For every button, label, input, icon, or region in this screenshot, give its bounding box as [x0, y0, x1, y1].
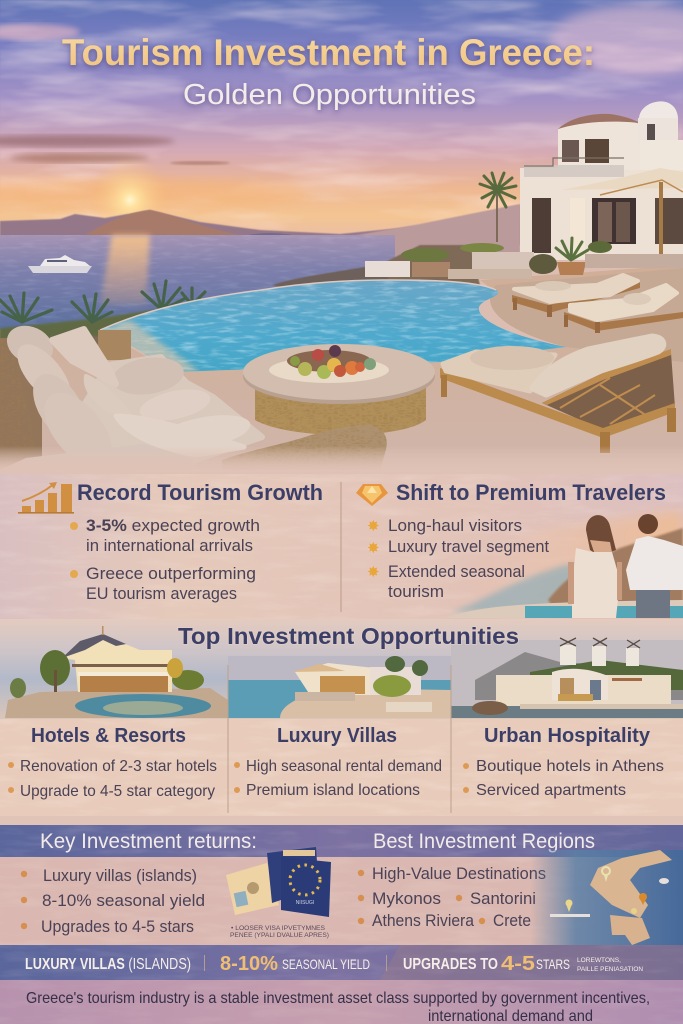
regions bullet list: Mykonos: [372, 889, 441, 908]
heading: top investment opportunities: Top Investment Opportunities: [178, 623, 519, 649]
column: hotels and resorts: Renovation of 2-3 star hotels: [20, 758, 217, 775]
scene: luxury villa: [228, 656, 451, 718]
panel: market trends: [0, 446, 683, 619]
scene: hotel and resort: [5, 626, 228, 718]
premium bullet list: ✸: [367, 540, 380, 557]
hero illustration: sunset terrace: [0, 0, 683, 479]
sea: [0, 235, 395, 331]
seat cushions: [75, 353, 262, 462]
icon: growth bar chart: [18, 482, 74, 514]
map pins: [566, 867, 647, 914]
returns bullet list: Luxury villas (islands): [43, 866, 197, 885]
growth bullet list: Greece outperforming: [86, 564, 256, 583]
stat band: [0, 945, 683, 980]
fine print: LOREWTONS,: [577, 957, 621, 964]
stat: seasonal yield: 8-10%: [220, 953, 278, 975]
column: urban hospitality: Boutique hotels in Athens: [476, 758, 664, 775]
column: urban hospitality: Urban Hospitality: [484, 725, 651, 747]
returns bullet list: [21, 866, 205, 936]
column: urban hospitality: Serviced apartments: [476, 782, 626, 799]
growth bullet list: EU tourism averages: [86, 584, 237, 603]
premium bullet list: tourism: [388, 582, 444, 601]
heading: key investment returns: Key Investment returns:: [40, 830, 257, 853]
fine print: PAILLE PENIASATION: [577, 966, 643, 973]
premium bullet list: Luxury travel segment: [388, 537, 549, 556]
returns bullet list: 8-10% seasonal yield: [42, 891, 205, 910]
stat: upgrades to 4-5 stars: 4-5: [501, 953, 535, 975]
title: main line: Tourism Investment in Greece:: [62, 32, 595, 73]
column: luxury villas: Premium island locations: [246, 782, 420, 799]
column: luxury villas: Luxury Villas: [277, 725, 397, 747]
palm tree: [480, 173, 516, 242]
throw pillows: [52, 329, 244, 455]
heading: shift to premium travelers: Shift to Premium Travelers: [396, 480, 666, 505]
couple: [568, 514, 683, 618]
icon: EU passports and visa card: NIISUGI: [296, 900, 314, 906]
infinity pool: [100, 280, 570, 375]
panel: returns and regions: [0, 816, 683, 945]
shore and palms: [0, 243, 504, 345]
returns bullet list: Upgrades to 4-5 stars: [41, 917, 194, 936]
premium bullet list: ✸: [367, 564, 380, 581]
column: hotels and resorts: Upgrade to 4-5 star category: [20, 783, 215, 800]
yacht: [28, 255, 92, 273]
hills: [0, 204, 520, 262]
scene: urban hospitality: [451, 638, 683, 718]
column: luxury villas: High seasonal rental demand: [246, 758, 442, 775]
heading: record tourism growth: [18, 480, 323, 514]
umbrella: [562, 168, 683, 264]
round stone table with fruit: [243, 344, 435, 440]
stat: upgrades to 4-5 stars: UPGRADES TO: [403, 956, 498, 973]
hero lower fade: [0, 446, 683, 474]
outdoor lounge behind pool: [412, 238, 683, 279]
regions bullet list: [358, 864, 546, 930]
premium bullet list: ✸: [367, 518, 380, 535]
deck: [0, 265, 683, 470]
rear sun loungers: [512, 275, 683, 333]
title block: [62, 32, 595, 111]
column: luxury villas: [234, 725, 442, 799]
regions bullet list: High-Value Destinations: [372, 864, 546, 883]
growth bullet list: in international arrivals: [86, 536, 253, 555]
front sun lounger: [440, 337, 676, 453]
sun: [88, 158, 172, 242]
heading: record tourism growth: Record Tourism Growth: [77, 480, 323, 505]
fruit plate: [269, 345, 389, 383]
fine print: [577, 957, 643, 973]
map of Greece: [530, 850, 683, 945]
premium bullet list: Long-haul visitors: [388, 516, 522, 535]
villa: [520, 101, 683, 260]
regions bullet list: Santorini: [470, 889, 536, 908]
stone terrace behind loungers: [490, 268, 683, 362]
footer statement: [0, 980, 683, 1024]
growth bullet list: 3-5% expected growth: [86, 516, 260, 535]
panel: top investment opportunities: [0, 619, 683, 816]
stat: seasonal yield: [220, 953, 370, 975]
stat: seasonal yield: SEASONAL YIELD: [282, 956, 370, 972]
passport caption: [230, 925, 329, 939]
back cushions: [1, 319, 125, 479]
regions bullet list: Crete: [493, 911, 531, 930]
column: hotels and resorts: Hotels & Resorts: [31, 725, 186, 747]
stat: upgrades to 4-5 stars: [403, 953, 570, 975]
title: subtitle: Golden Opportunities: [183, 79, 476, 111]
icon: diamond: [356, 484, 388, 506]
passport caption: • LOOSER VISA IPVETYMNES: [231, 925, 325, 932]
couple scene background: [430, 510, 683, 618]
stat: upgrades to 4-5 stars: STARS: [536, 956, 570, 972]
icon: EU passports and visa card: [226, 847, 331, 917]
passport caption: PENEE (YPALI DVALUE APRES): [230, 932, 329, 939]
growth bullet list: [70, 516, 260, 603]
column: urban hospitality: [463, 725, 664, 799]
premium bullet list: [367, 516, 549, 601]
stat: luxury villas: LUXURY VILLAS (ISLANDS): [25, 956, 191, 973]
regions bullet list: Athens Riviera: [372, 911, 474, 930]
wicker sofa with cushions: [0, 326, 387, 466]
column: hotels and resorts: [8, 725, 217, 800]
heading: best investment regions: Best Investment Regions: [373, 830, 595, 853]
premium bullet list: Extended seasonal: [388, 562, 525, 581]
sky: [0, 0, 683, 240]
